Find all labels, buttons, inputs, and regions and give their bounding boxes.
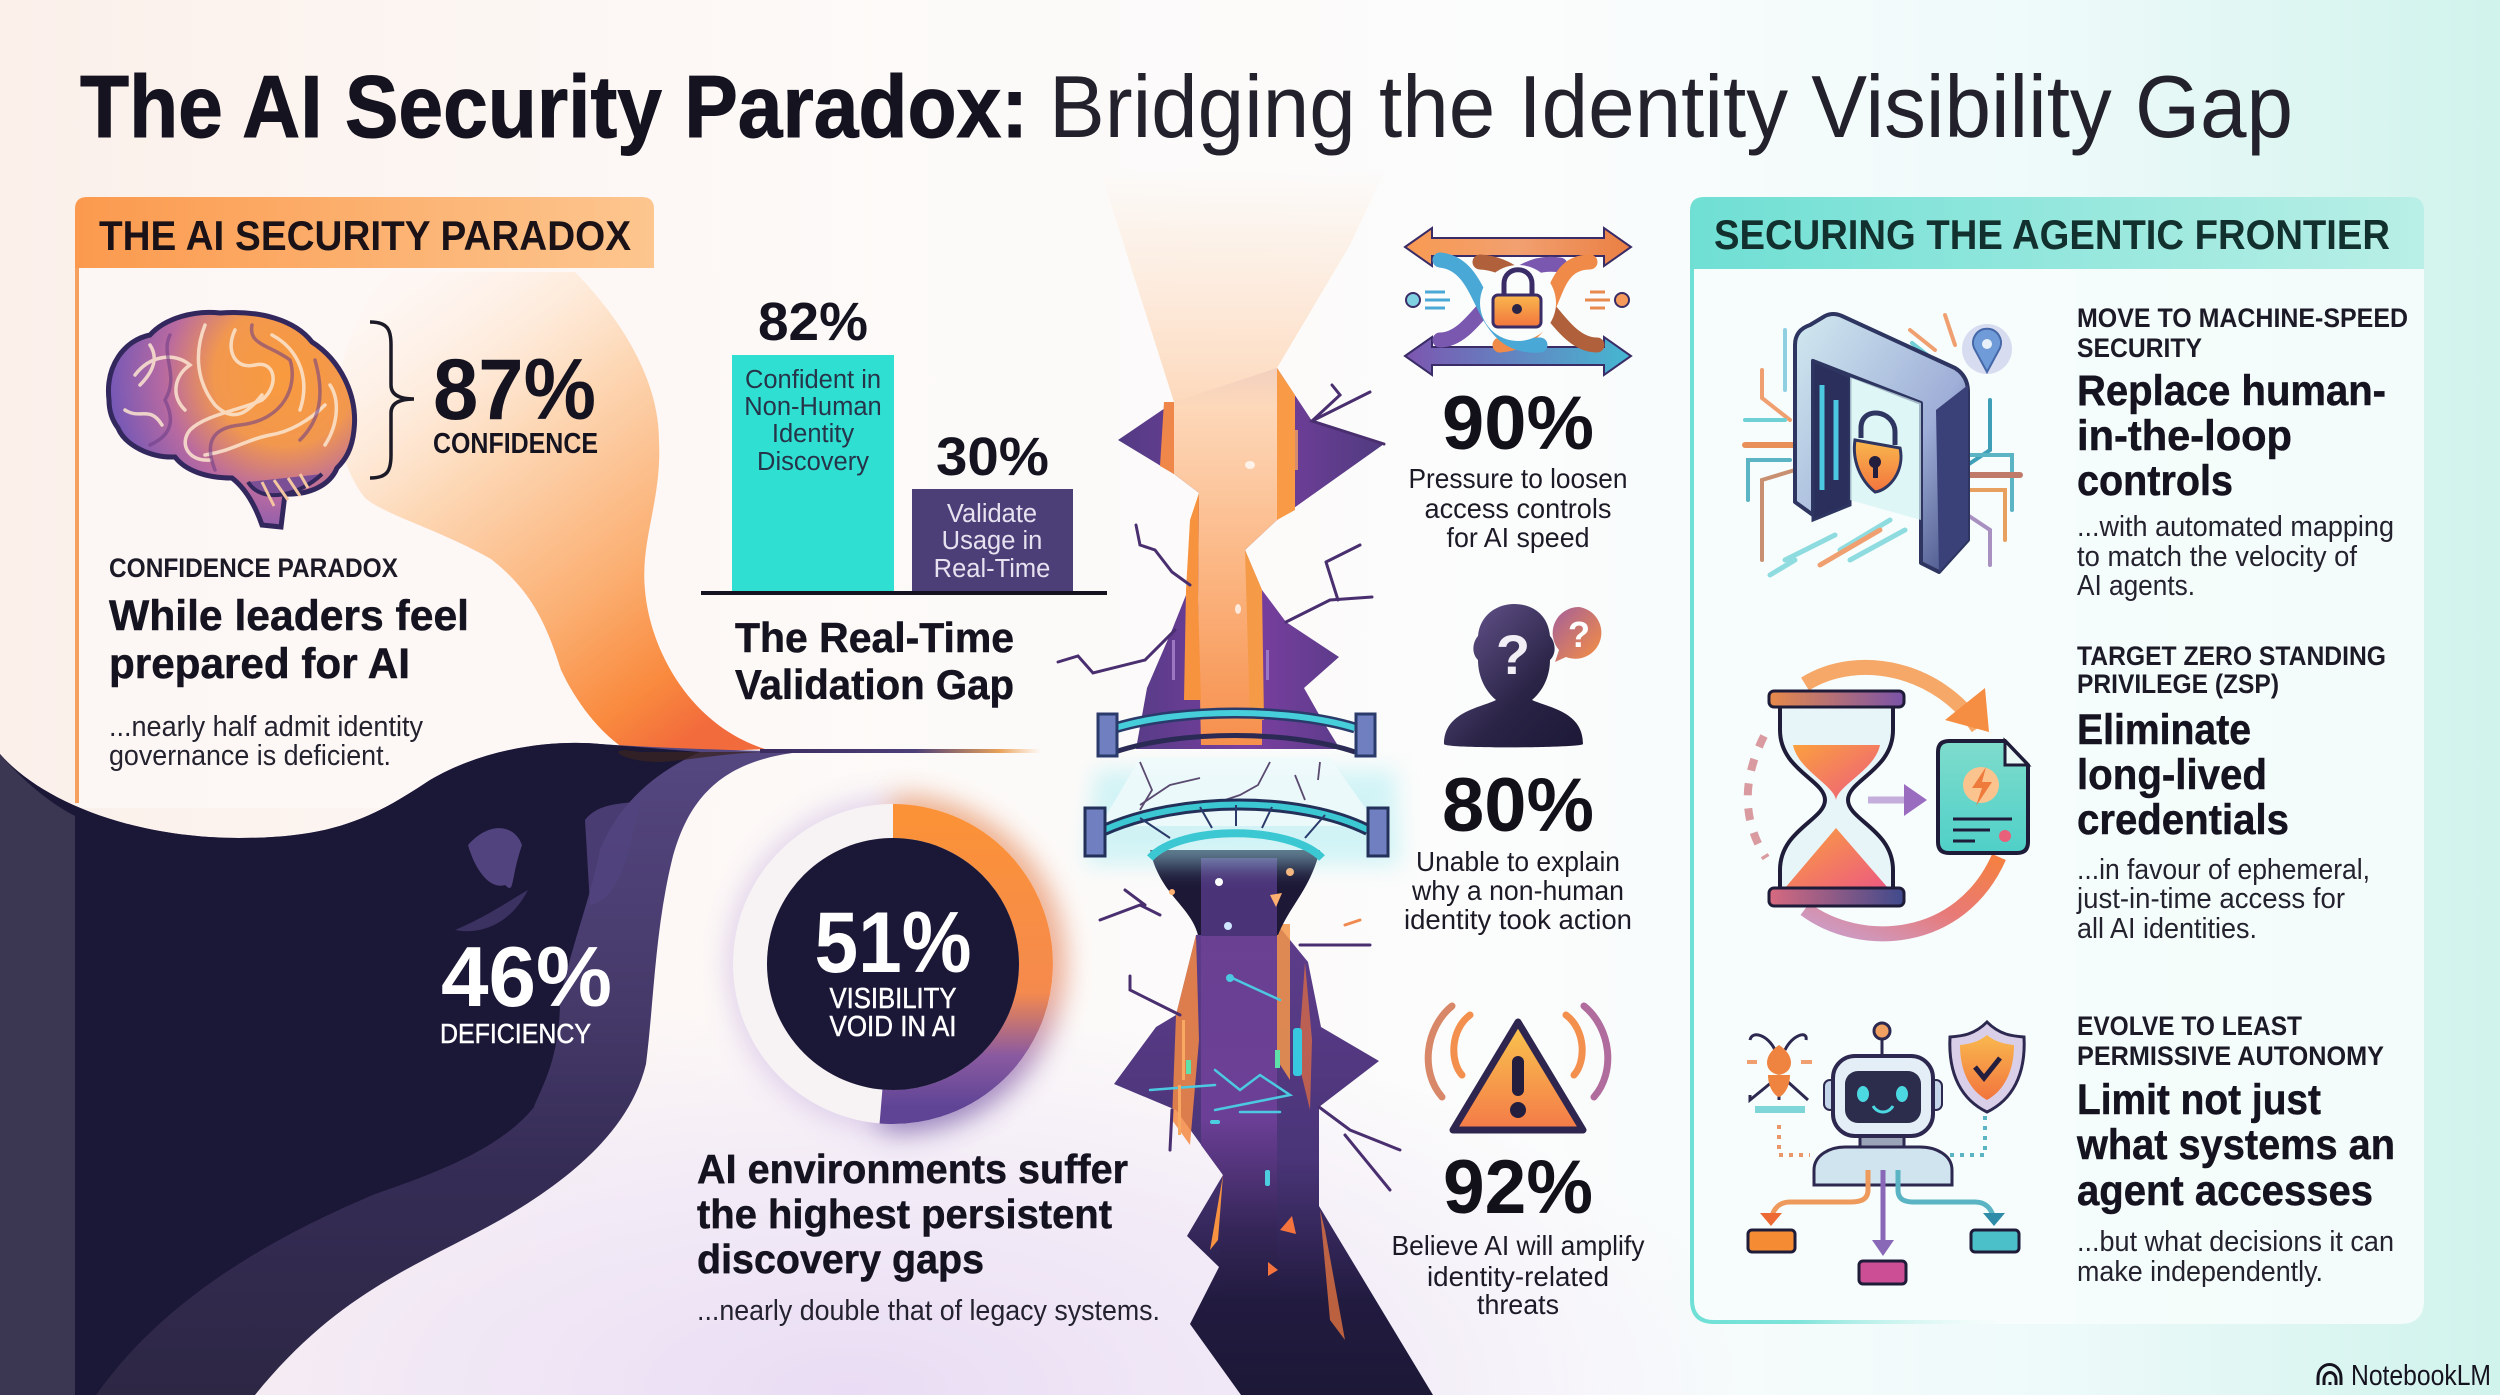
heading: Eliminate [2077,706,2251,754]
text block: discovery gaps [697,1146,1160,1327]
body: ...with automated mapping [2077,511,2394,543]
kicker: EVOLVE TO LEAST [2077,1011,2302,1041]
body: ...but what decisions it can [2077,1226,2394,1258]
icon: unknown identity: ? [1496,623,1530,686]
heading: the highest persistent [697,1191,1112,1237]
left panel body [78,268,718,808]
panel: the AI security paradox [75,197,765,808]
bar text: confident: Identity [772,420,854,448]
heading: prepared for AI: prepared for AI [109,640,410,688]
icon: hourglass and credential [1748,667,2028,934]
bar text: confident: Discovery [757,448,869,476]
bar chart: real-time validation gap [701,292,1107,708]
stat label: DEFICIENCY [440,1018,591,1049]
body: to match the velocity of [2077,541,2357,573]
stat text: amplify: identity-related [1427,1261,1609,1292]
bar: confident in discovery [732,355,894,591]
stat text: pressure: for AI speed [1446,522,1590,553]
panel heading: THE AI SECURITY PARADOX [99,212,631,259]
bar label: 82%: 82% [758,292,868,352]
NotebookLM logo [2318,1360,2491,1392]
icon: loosened access lock [1405,228,1631,375]
donut label: VISIBILITY [830,983,956,1015]
title: The AI Security Paradox: [80,57,1028,156]
heading: controls [2077,457,2233,505]
panel: securing the agentic frontier [1690,197,2424,1324]
icon: brain [108,312,355,527]
orange flow ribbon [337,272,765,760]
panel border [75,268,79,803]
chart axis [701,591,1107,595]
panel heading: SECURING THE AGENTIC FRONTIER [1714,211,2390,258]
panel header [75,197,654,268]
kicker: MOVE TO MACHINE-SPEED [2077,303,2408,333]
panel body [1690,269,2424,1324]
stat text: unable: Unable to explain [1416,846,1620,877]
bar text: validate: Usage in [942,527,1042,555]
body: all AI identities. [2077,913,2257,945]
icon: security gate [1745,314,2020,575]
body: AI agents. [2077,570,2195,602]
kicker: SECURITY [2077,333,2202,363]
item 2 text [2076,641,2386,945]
kicker: TARGET ZERO STANDING [2077,641,2386,671]
connector line [760,749,1042,753]
heading: Replace human- [2077,367,2386,415]
heading: AI environments suffer [697,1146,1128,1192]
heading: credentials [2077,796,2289,844]
heading: discovery gaps [697,1236,984,1282]
bar text: validate: Real-Time [934,555,1050,583]
stats column [1392,228,1645,1320]
logo mark [2318,1364,2341,1385]
brace [370,322,414,478]
bridge [1085,713,1400,865]
stat value: 46% [441,930,612,1025]
heading: Limit not just [2077,1076,2321,1124]
body: ...in favour of ephemeral, [2077,854,2370,886]
chart title: Validation Gap [735,661,1014,708]
bar text: confident: Non-Human [744,393,882,421]
stat text: pressure: Pressure to loosen [1408,463,1628,494]
donut label: VOID IN AI [830,1011,956,1043]
stat text: pressure: access controls [1424,493,1612,524]
kicker: PRIVILEGE (ZSP) [2077,669,2279,699]
heading: in-the-loop [2077,412,2292,460]
bridge upper rail [1115,713,1355,728]
item 1 text [2077,303,2408,602]
chart title: The Real-Time [735,614,1014,661]
bar label: 30%: 30% [936,427,1049,487]
panel border [1692,269,2000,1322]
stat text: amplify: threats [1477,1289,1559,1320]
dark void shape [0,743,800,1395]
stat: 92%: 92% [1443,1145,1593,1230]
title subtitle: Bridging the Identity Visibility Gap [1049,57,2293,156]
donut chart: 51% visibility void [743,814,1047,1114]
bar text: confident: Confident in [745,366,881,394]
stat: 90%: 90% [1442,381,1594,466]
stat: 46% deficiency [440,930,612,1049]
body: make independently. [2077,1256,2323,1288]
bridge lower deck [1104,804,1368,830]
lower crack [1100,850,1433,1395]
body: just-in-time access for [2076,883,2345,915]
bar text: validate: Validate [947,500,1037,528]
stat text: unable: identity took action [1404,904,1632,935]
heading: while leaders feel: While leaders feel [109,592,469,640]
body: ...nearly double that of legacy systems. [697,1295,1160,1327]
panel header [1690,197,2424,269]
body text: governance: governance is deficient. [109,740,391,772]
icon: robot agent [1747,1022,2024,1284]
icon: warning [1428,1006,1608,1130]
heading: long-lived [2077,751,2267,799]
central crack with bridge [1058,170,1433,1395]
upper crack [1058,170,1385,749]
body text: governance: ...nearly half admit identity [109,711,424,743]
stat: 80%: 80% [1442,763,1594,848]
stat: 87%: 87% [433,342,596,438]
icon: unknown identity [1444,604,1601,747]
kicker: PERMISSIVE AUTONOMY [2077,1041,2384,1071]
heading: what systems an [2076,1121,2395,1169]
item 3 text [2076,1011,2395,1288]
stat label: confidence: CONFIDENCE [433,428,598,460]
stat text: amplify: Believe AI will amplify [1392,1230,1645,1261]
donut value: 51% [814,895,972,991]
bar: validate usage [912,489,1073,591]
icon: unknown identity: ? [1568,614,1590,655]
kicker: confidence paradox: CONFIDENCE PARADOX [109,553,398,583]
heading: agent accesses [2077,1167,2373,1215]
stat text: unable: why a non-human [1411,875,1624,906]
